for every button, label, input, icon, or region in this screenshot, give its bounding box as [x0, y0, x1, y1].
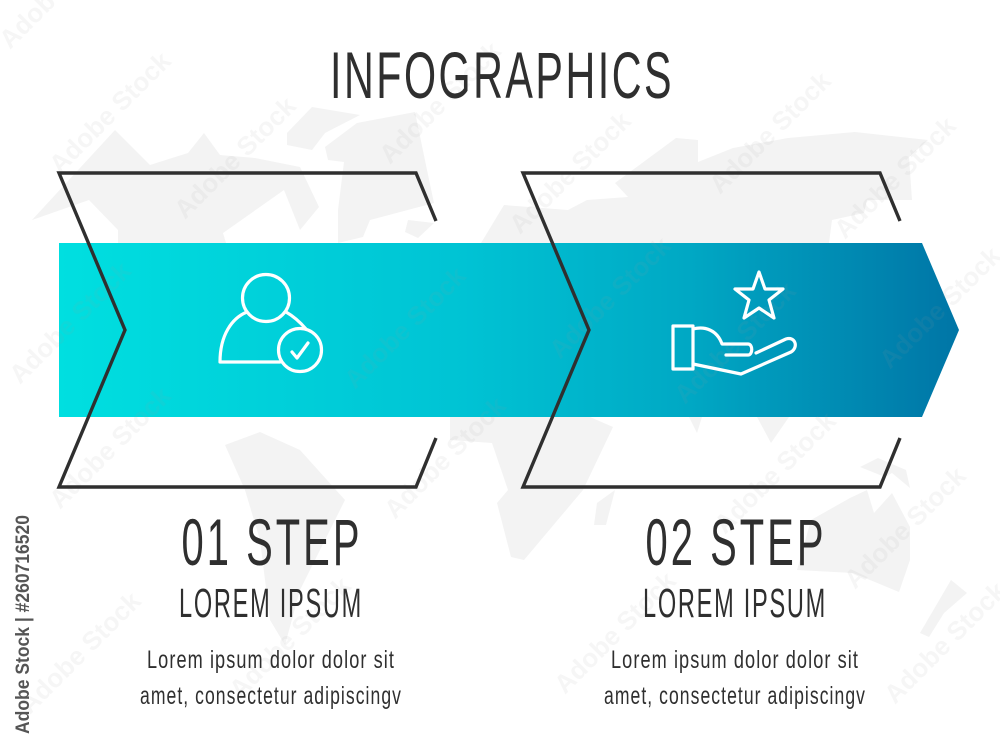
icon: hand holding star — [673, 272, 795, 374]
step 1 description — [140, 646, 402, 710]
step 2 subheading: LOREM IPSUM — [643, 580, 827, 626]
faint stock watermarks: Adobe Stock — [43, 45, 177, 179]
icon: user with check mark — [220, 274, 322, 372]
world map background — [32, 107, 967, 645]
faint stock watermarks: Adobe Stock — [168, 90, 302, 224]
step 1 chevron outline — [59, 173, 436, 487]
step 1 heading: 01 STEP — [182, 505, 362, 579]
faint stock watermarks: Adobe Stock — [373, 35, 507, 169]
title: INFOGRAPHICS — [330, 38, 674, 112]
faint stock watermarks: Adobe Stock — [668, 275, 802, 409]
step 1 description: Lorem ipsum dolor dolor sit — [147, 646, 395, 674]
step 2 heading: 02 STEP — [646, 505, 826, 579]
faint stock watermarks: Adobe Stock — [3, 255, 137, 389]
faint stock watermarks: Adobe Stock — [223, 570, 357, 704]
step 2 chevron outline — [523, 173, 900, 487]
faint stock watermarks: Adobe Stock — [13, 585, 147, 719]
faint stock watermarks: Adobe Stock — [543, 230, 677, 364]
faint stock watermarks: Adobe Stock — [838, 460, 972, 594]
faint stock watermarks: Adobe Stock — [338, 260, 472, 394]
step 1 description: amet, consectetur adipiscingv — [140, 682, 402, 710]
faint stock watermarks: Adobe Stock — [548, 565, 682, 699]
step 2 description: amet, consectetur adipiscingv — [604, 682, 866, 710]
step 2 description — [604, 646, 866, 710]
faint stock watermarks: Adobe Stock — [828, 110, 962, 244]
faint stock watermarks: Adobe Stock — [708, 405, 842, 539]
stock watermark id: Adobe Stock | #260716520 — [13, 515, 34, 734]
faint stock watermarks: Adobe Stock — [378, 390, 512, 524]
faint stock watermarks: Adobe Stock — [703, 65, 837, 199]
faint stock watermarks: Adobe Stock — [43, 380, 177, 514]
main gradient arrow band — [59, 243, 959, 417]
step 2 description: Lorem ipsum dolor dolor sit — [611, 646, 859, 674]
step 1 subheading: LOREM IPSUM — [179, 580, 363, 626]
faint stock watermarks: Adobe Stock — [503, 105, 637, 239]
